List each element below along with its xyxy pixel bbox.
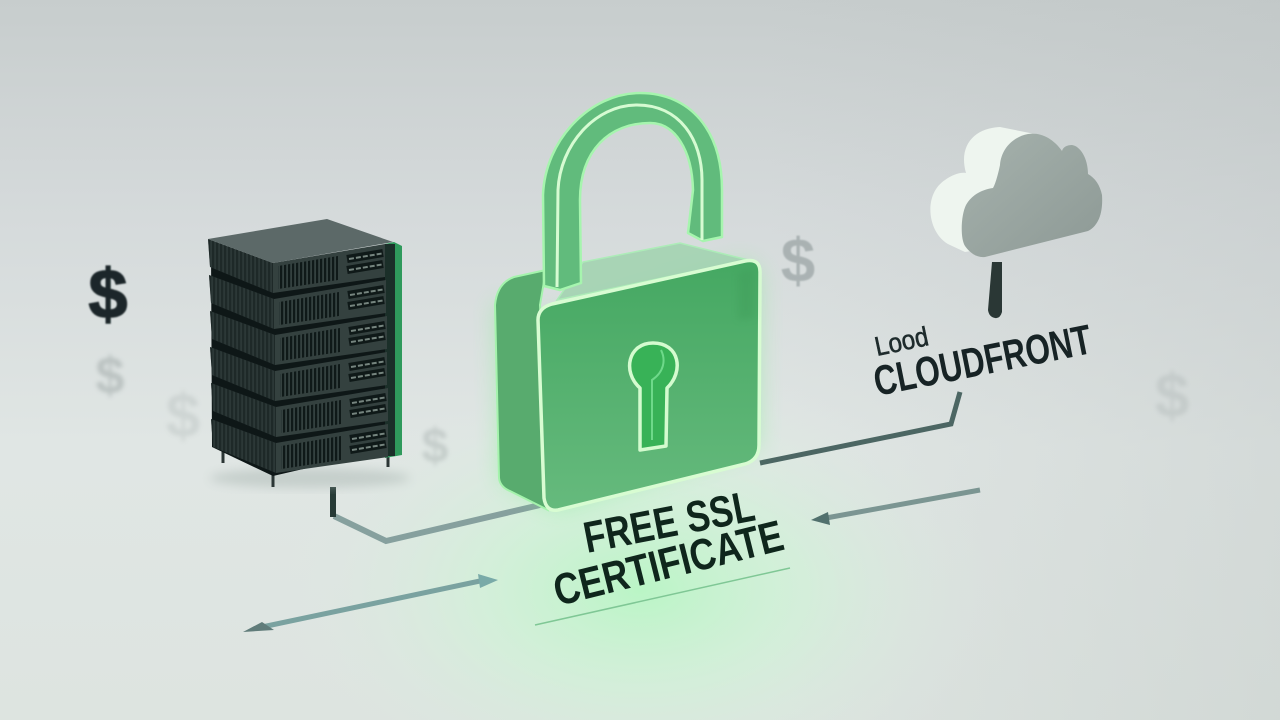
underline	[535, 568, 790, 625]
server unit 3	[210, 311, 387, 365]
keyhole	[630, 343, 677, 450]
icon: faded dollar sign far right: $	[1155, 362, 1189, 431]
rack legs	[223, 450, 388, 487]
label: Lood CloudFront: Lood	[872, 321, 931, 362]
cloud back	[930, 127, 1040, 252]
icon: faded dollar sign left: $	[96, 347, 125, 405]
stack backing	[211, 250, 385, 476]
connector: cloudfront to lock	[760, 392, 960, 463]
server unit 4	[210, 347, 387, 401]
cloud front	[962, 134, 1102, 257]
green side strip	[385, 242, 402, 458]
lock front face	[538, 260, 760, 510]
label: Lood CloudFront	[870, 315, 1096, 405]
shackle highlight	[557, 105, 702, 287]
arrow: pointing left	[811, 490, 980, 525]
heading: Free SSL Certificate: CERTIFICATE	[549, 511, 788, 616]
icon: faded dollar sign by lock: $	[781, 227, 815, 296]
server unit 5	[211, 383, 388, 437]
arrow: double-headed	[243, 574, 498, 632]
lock top back	[557, 243, 748, 300]
server top	[208, 219, 393, 263]
icon: cloud	[930, 127, 1102, 318]
label: Lood CloudFront: CLOUDFRONT	[870, 315, 1096, 405]
icon: server rack	[208, 219, 410, 488]
lock glow	[495, 261, 760, 510]
icon: faded dollar sign near server: $	[166, 382, 200, 451]
server unit 2	[209, 275, 386, 329]
server unit 6	[211, 419, 388, 473]
right bevel	[738, 269, 754, 320]
cloud stem	[988, 262, 1002, 318]
server unit 1	[208, 219, 393, 293]
lock side	[495, 270, 548, 510]
icon: faded dollar sign right of server: $	[422, 420, 449, 473]
icon: green padlock	[495, 93, 760, 510]
icon: dark dollar sign: $	[89, 255, 127, 333]
heading: Free SSL Certificate: FREE SSL	[580, 482, 759, 563]
heading: Free SSL Certificate	[535, 482, 790, 625]
shackle	[543, 93, 722, 290]
connector: server to lock	[333, 487, 540, 541]
